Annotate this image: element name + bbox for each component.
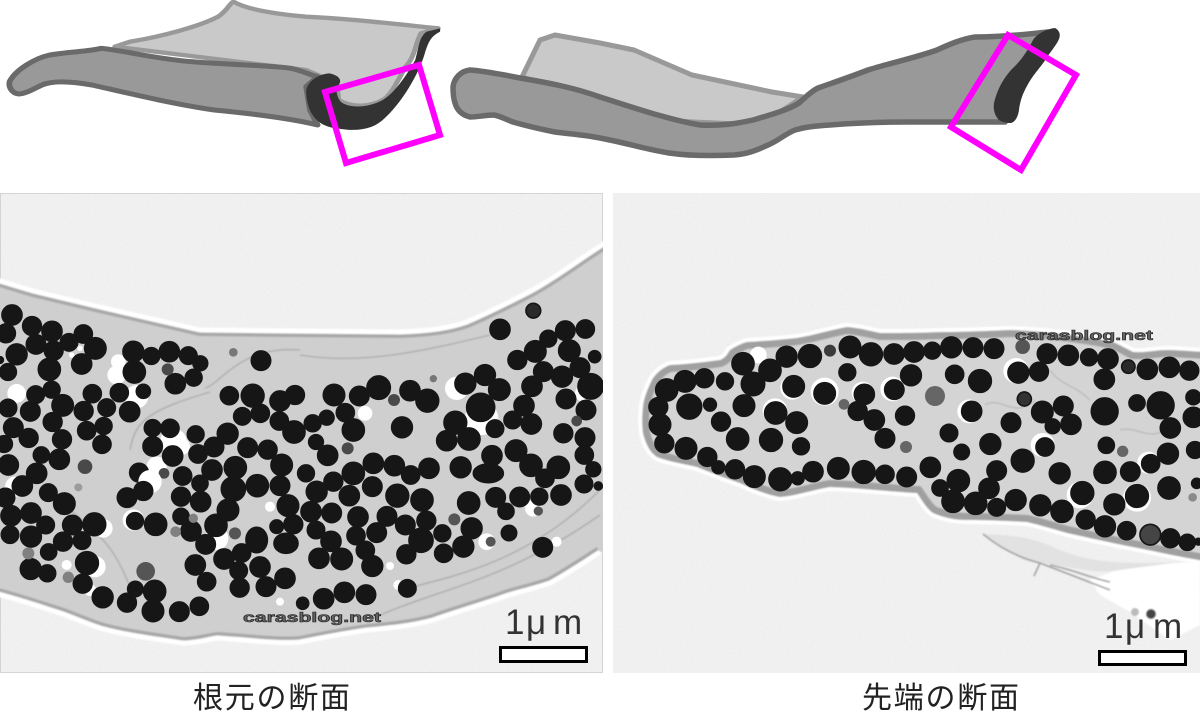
dark granules: lower right xyxy=(297,472,602,609)
scale label: tip panel: 1μm xyxy=(1104,607,1182,646)
dark lower sheet of wing base xyxy=(9,48,318,125)
panel: root cross-section micrograph xyxy=(0,193,620,673)
dark granules: upper right xyxy=(298,303,603,487)
tissue outline xyxy=(630,320,1200,570)
illustration: wing base with magenta cross-section frame xyxy=(9,2,440,163)
light upper sheet of wing tip xyxy=(522,35,803,125)
tissue outline xyxy=(0,230,620,660)
black cut edge of wing tip xyxy=(994,28,1060,123)
black cut edge of wing base xyxy=(306,28,440,130)
scale bar: tip panel xyxy=(1100,652,1186,664)
dark granules: lower left xyxy=(0,470,303,622)
watermark: tip panel: carasblog.net xyxy=(1015,327,1154,343)
scale bar: root panel xyxy=(500,648,586,662)
dark lower sheet of wing tip xyxy=(453,32,1048,156)
dark granules: tip left xyxy=(649,336,905,491)
illustration: wing tip with magenta cross-section frame xyxy=(453,28,1076,170)
light upper sheet of wing base xyxy=(115,2,438,106)
scale label: root panel: 1μm xyxy=(505,603,582,642)
dark granules: upper left xyxy=(0,305,305,485)
magenta frame: base section xyxy=(325,65,440,163)
magenta frame: tip section xyxy=(951,35,1076,170)
panel: tip cross-section micrograph xyxy=(613,193,1200,673)
dark granules: tip right xyxy=(896,337,1200,550)
debris and torn white region xyxy=(983,534,1200,640)
watermark: root panel: carasblog.net xyxy=(243,609,382,625)
